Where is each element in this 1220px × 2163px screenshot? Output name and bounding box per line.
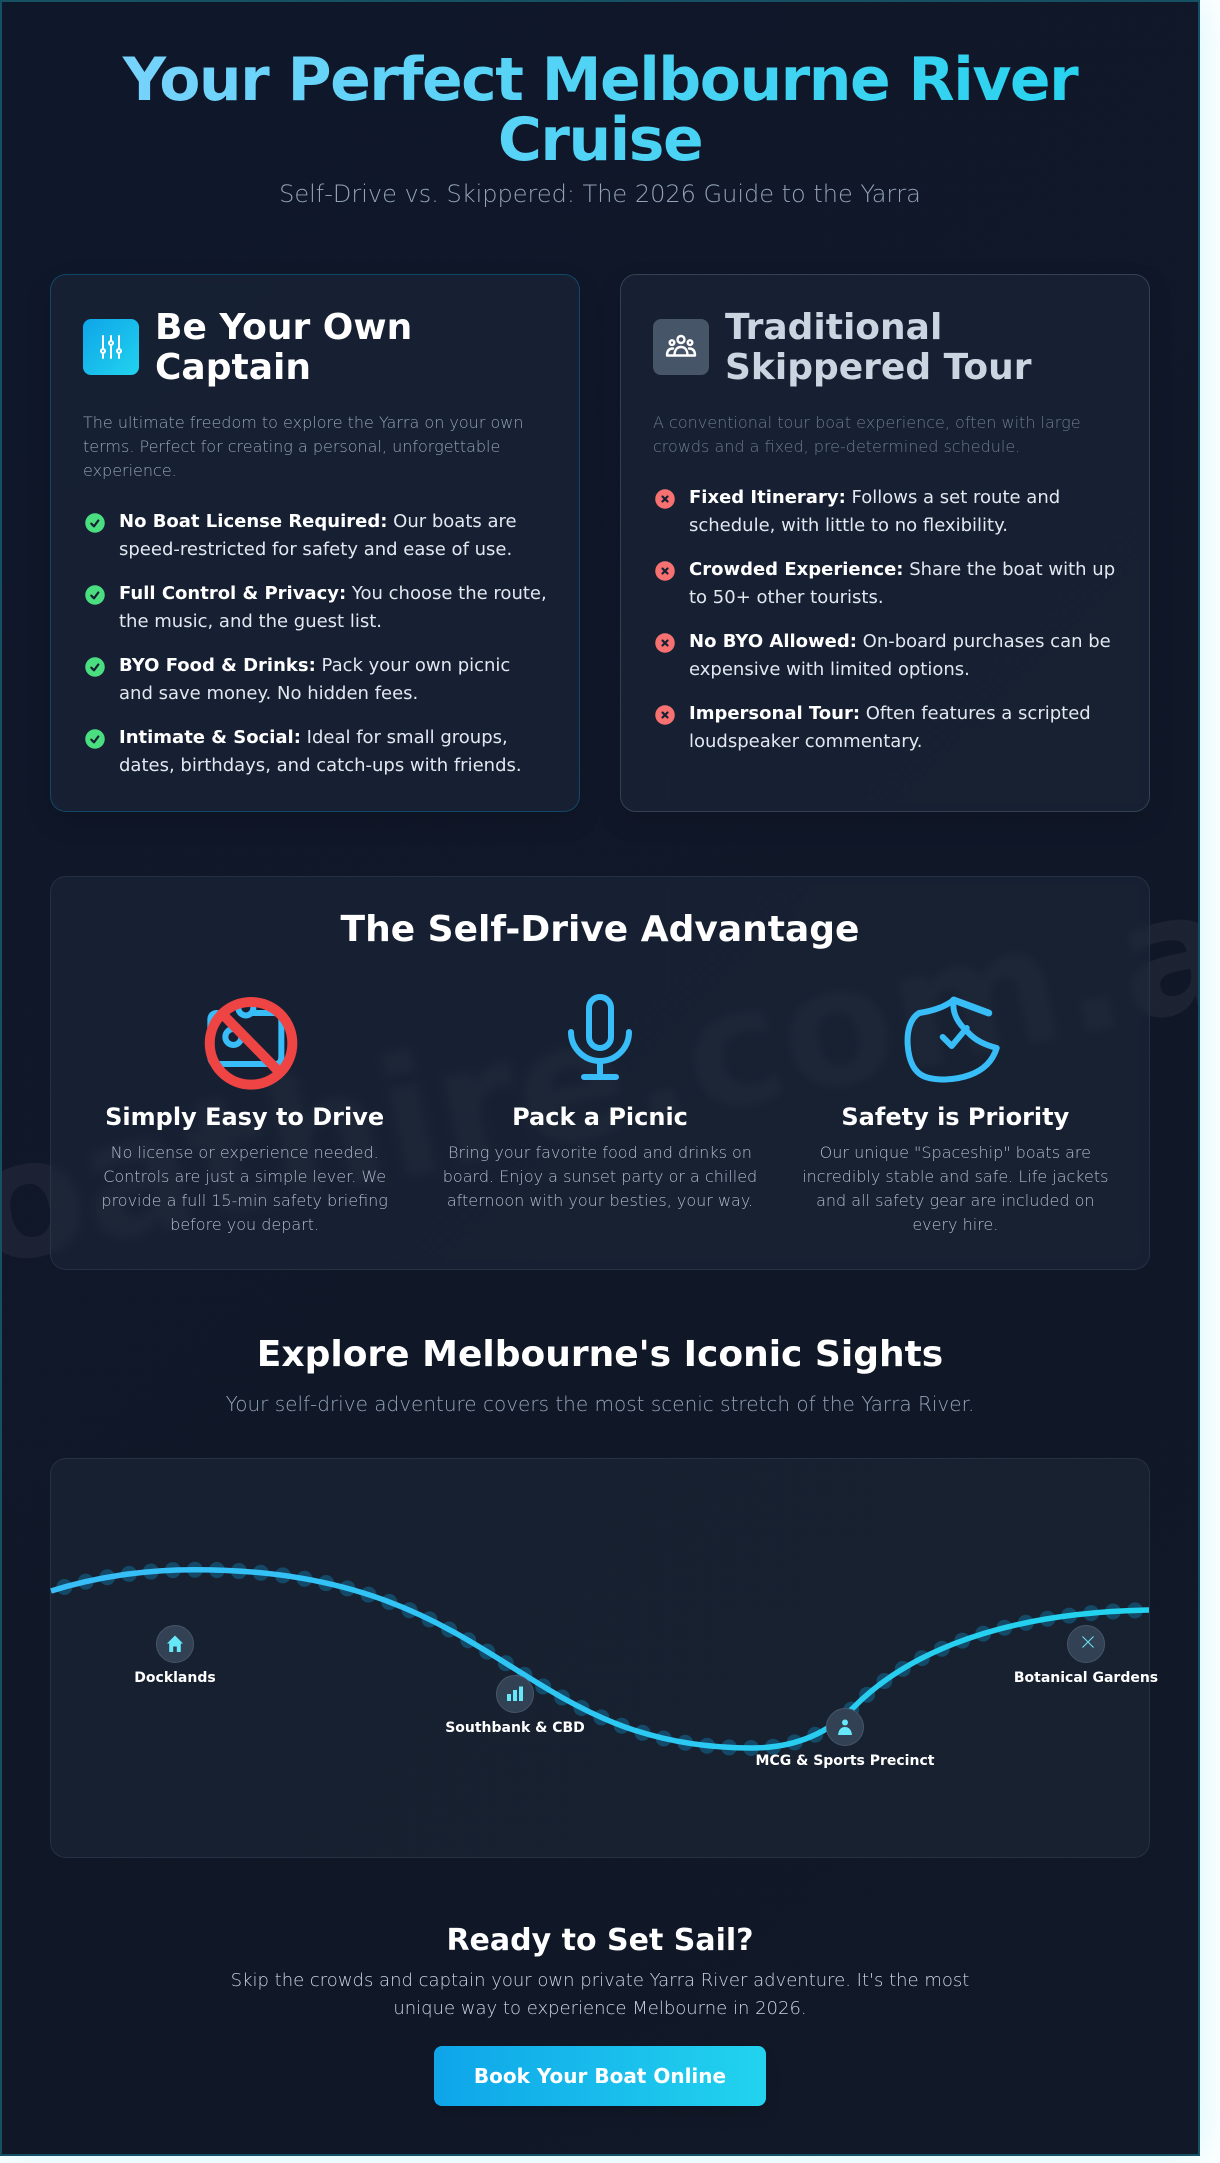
- feature title: Simply Easy to Drive: [105, 1103, 384, 1131]
- feature: pack a picnic: [443, 994, 757, 1210]
- drawback: crowded: Crowded Experience: Share the boat with up to 50+ other tourists.: [689, 559, 1115, 608]
- heading text: Traditional Skippered Tour: [725, 307, 1032, 388]
- feature text: Our unique "Spaceship" boats are incredibly stable and safe. Life jackets and all safety gear are included on every hire.: [802, 1143, 1108, 1234]
- feature: easy to drive: [101, 997, 388, 1234]
- benefit: no boat license: No Boat License Required: Our boats are speed-restricted for safety and ease of use.: [119, 511, 517, 560]
- button: [434, 2046, 766, 2106]
- icon: group of people: [653, 319, 709, 375]
- comparison cards: [50, 274, 1150, 812]
- marker: Botanical Gardens: [1014, 1625, 1158, 1686]
- section heading: sights: [226, 1334, 974, 1416]
- benefit: full control: Full Control & Privacy: You choose the route, the music, and the guest list.: [119, 583, 547, 632]
- supporting text: Skip the crowds and captain your own private Yarra River adventure. It's the most unique way to experience Melbourne in 2026.: [231, 1970, 969, 2019]
- feature title: Pack a Picnic: [512, 1103, 688, 1131]
- feature text: Bring your favorite food and drinks on board. Enjoy a sunset party or a chilled afternoon with your besties, your way.: [443, 1143, 757, 1210]
- icon: cross: [1067, 1625, 1105, 1663]
- heading text: Be Your Own Captain: [155, 307, 412, 388]
- feature columns: [101, 994, 1108, 1234]
- title: Your Perfect Melbourne River Cruise: [123, 45, 1077, 175]
- drawback: no BYO: No BYO Allowed: On-board purchases can be expensive with limited options.: [689, 631, 1111, 680]
- subtitle: Self-Drive vs. Skippered: The 2026 Guide to the Yarra: [279, 180, 921, 208]
- icon: sliders: [83, 319, 139, 375]
- panel: traditional skippered tour: [620, 274, 1150, 812]
- button: Book Your Boat Online: [474, 2064, 726, 2088]
- call to action: [231, 1923, 969, 2106]
- panel: river map: [50, 1458, 1150, 1858]
- marker: Southbank: [445, 1675, 585, 1736]
- feature text: No license or experience needed. Controls are just a simple lever. We provide a full 15-min safety briefing before you depart.: [101, 1143, 388, 1234]
- marker: Docklands: [134, 1625, 216, 1686]
- icon: microphone: [568, 994, 632, 1080]
- river route: [50, 1562, 1150, 1756]
- icon: person: [826, 1708, 864, 1746]
- card heading: [653, 307, 1032, 388]
- place label: Botanical Gardens: [1014, 1670, 1158, 1686]
- benefit: BYO food: BYO Food & Drinks: Pack your own picnic and save money. No hidden fees.: [119, 655, 510, 704]
- drawback: fixed itinerary: Fixed Itinerary: Follows a set route and schedule, with little to no flexibility.: [689, 487, 1060, 536]
- benefit: intimate and social: Intimate & Social: Ideal for small groups, dates, birthdays, and catch-ups with friends.: [119, 727, 522, 776]
- description: A conventional tour boat experience, often with large crowds and a fixed, pre-determined schedule.: [653, 413, 1081, 456]
- place label: MCG & Sports Precinct: [756, 1753, 934, 1769]
- panel: be your own captain: [50, 274, 580, 812]
- header: [122, 45, 1079, 208]
- feature title: Safety is Priority: [841, 1103, 1069, 1131]
- heading text: Ready to Set Sail?: [446, 1923, 754, 1958]
- card heading: [83, 307, 412, 388]
- section heading: The Self-Drive Advantage: [341, 909, 859, 950]
- description: The ultimate freedom to explore the Yarra on your own terms. Perfect for creating a personal, unforgettable experience.: [83, 413, 524, 480]
- place label: Southbank & CBD: [445, 1720, 585, 1736]
- drawback: impersonal: Impersonal Tour: Often features a scripted loudspeaker commentary.: [689, 703, 1091, 752]
- icon: shield check: [904, 996, 1000, 1082]
- heading text: Explore Melbourne's Iconic Sights: [257, 1334, 943, 1375]
- place label: Docklands: [134, 1670, 216, 1686]
- panel: self-drive advantage: [50, 876, 1150, 1270]
- icon: bar chart: [496, 1675, 534, 1713]
- icon: house: [156, 1625, 194, 1663]
- section subtitle: Your self-drive adventure covers the most scenic stretch of the Yarra River.: [226, 1392, 974, 1416]
- icon: no licence: [204, 997, 298, 1090]
- feature: safety: [802, 996, 1108, 1234]
- marker: MCG: [756, 1708, 934, 1769]
